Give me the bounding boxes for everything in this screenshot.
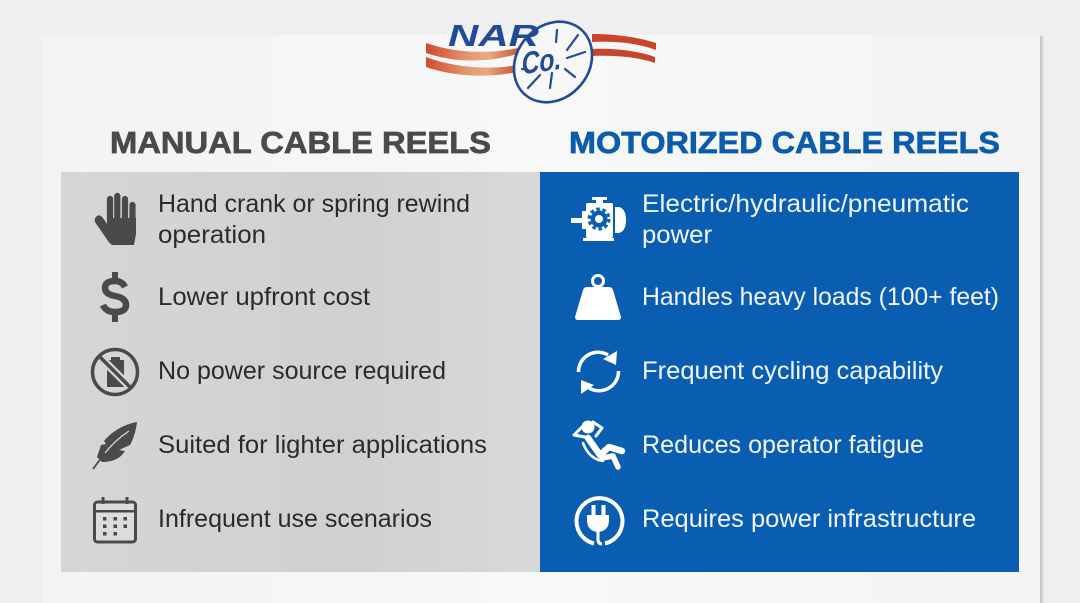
logo — [426, 6, 656, 118]
icon: relaxing person — [574, 420, 622, 467]
text: hand crank: Hand crank or spring rewind — [158, 190, 470, 218]
icon: cycle arrows — [578, 351, 619, 394]
logo wheel — [498, 6, 608, 118]
heading: manual cable reels: MANUAL CABLE REELS — [110, 125, 491, 160]
icon: weight — [575, 276, 621, 320]
icon: feather — [93, 422, 137, 469]
text: frequent cycling: Frequent cycling capability — [642, 357, 944, 385]
icon: no battery — [92, 350, 138, 394]
panel: manual — [61, 172, 540, 572]
icon: motor — [571, 197, 626, 241]
logo swooshes left — [426, 43, 522, 76]
panel: motorized — [540, 172, 1019, 572]
logo Co text: Co. — [521, 41, 562, 81]
text: lower cost: Lower upfront cost — [158, 283, 370, 311]
icon: hand — [95, 196, 136, 245]
text: operator fatigue: Reduces operator fatigue — [642, 431, 924, 459]
text: no power source: No power source required — [158, 357, 446, 385]
heading: motorized cable reels: MOTORIZED CABLE REELS — [569, 125, 1000, 160]
logo swooshes right — [592, 34, 656, 63]
icon: power plug — [577, 498, 622, 544]
text: infrequent use: Infrequent use scenarios — [158, 505, 432, 533]
text: electric power: Electric/hydraulic/pneumatic — [642, 190, 969, 218]
text: lighter applications: Suited for lighter applications — [158, 431, 487, 459]
text: power: power — [642, 221, 712, 249]
text: operation: operation — [158, 221, 266, 249]
logo NAR text: NAR — [448, 18, 540, 53]
icon: calendar — [94, 497, 136, 542]
icon: dollar — [103, 272, 126, 322]
text: heavy loads: Handles heavy loads (100+ feet) — [642, 283, 999, 311]
text: power infrastructure: Requires power infrastructure — [642, 505, 976, 533]
